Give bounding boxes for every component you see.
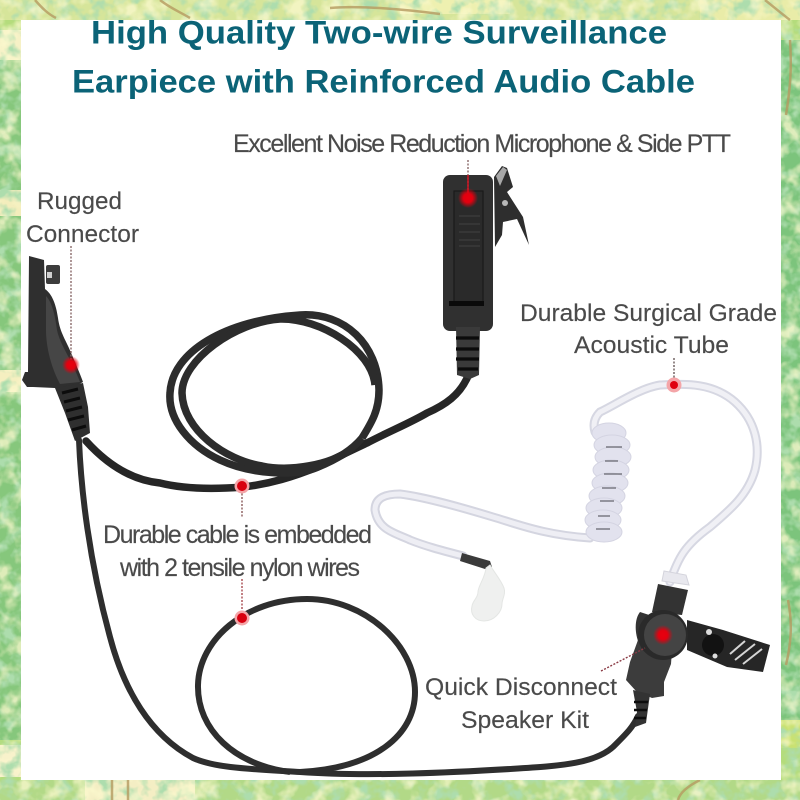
callout: speaker leader bbox=[601, 625, 673, 671]
label: quick disconnect: Speaker Kit bbox=[461, 707, 589, 734]
label: rugged connector: Rugged bbox=[37, 188, 122, 215]
cable: lower run from connector to speaker bbox=[79, 440, 638, 774]
cable: lower coil loop bbox=[198, 599, 415, 772]
callout: cable leader lower bbox=[234, 579, 250, 626]
title: High Quality Two-wire Surveillance bbox=[91, 14, 667, 50]
icon: coiled tube bbox=[585, 423, 631, 542]
label: durable cable: with 2 tensile nylon wires bbox=[119, 554, 360, 582]
label: acoustic tube bbox=[520, 300, 777, 359]
label: quick disconnect bbox=[425, 674, 617, 734]
callout: cable leader upper bbox=[234, 478, 250, 518]
label: durable cable: Durable cable is embedded bbox=[103, 521, 372, 549]
callout: rugged connector leader bbox=[62, 246, 80, 374]
cable: upper run from connector to microphone bbox=[86, 376, 468, 488]
cable: upper coil loop bbox=[170, 315, 379, 473]
label: acoustic tube: Acoustic Tube bbox=[574, 332, 729, 359]
icon: microphone and PTT box bbox=[443, 166, 529, 379]
label: microphone and PTT: Excellent Noise Reduction Microphone & Side PTT bbox=[233, 130, 731, 158]
callout: acoustic tube leader bbox=[666, 358, 682, 392]
icon: quick disconnect speaker bbox=[626, 571, 770, 727]
icon: rugged connector bbox=[22, 256, 90, 441]
title: Earpiece with Reinforced Audio Cable bbox=[72, 64, 695, 100]
label: rugged connector: Connector bbox=[26, 221, 139, 248]
label: acoustic tube: Durable Surgical Grade bbox=[520, 300, 777, 327]
callout: microphone leader bbox=[458, 160, 478, 208]
label: rugged connector bbox=[26, 188, 139, 248]
title bbox=[72, 14, 695, 100]
icon: ear tip bbox=[460, 553, 505, 621]
label: quick disconnect: Quick Disconnect bbox=[425, 674, 617, 701]
icon: clear acoustic tube bbox=[375, 384, 757, 582]
label: durable cable bbox=[103, 521, 372, 582]
